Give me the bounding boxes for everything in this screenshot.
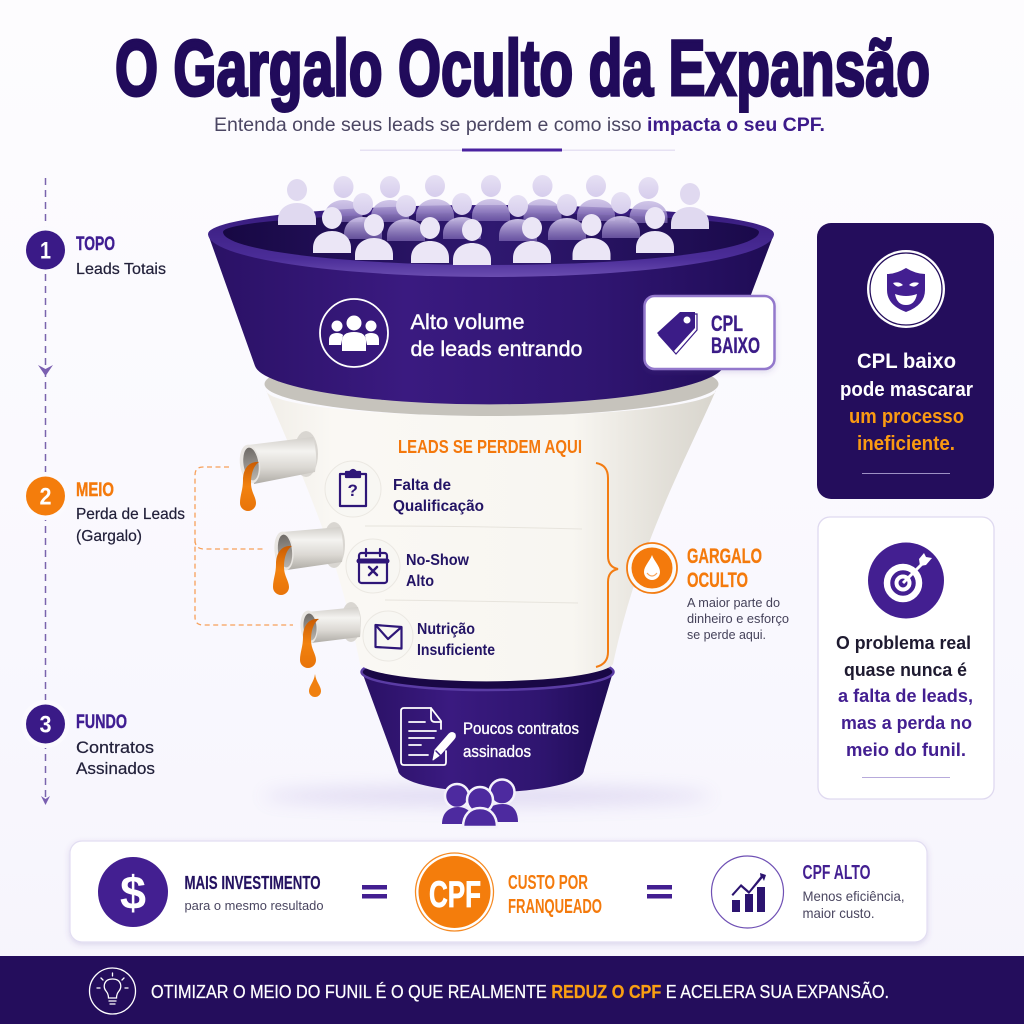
- row: falta de qualificação: Qualificação: [393, 498, 484, 515]
- stage 2: (Gargalo): [76, 528, 142, 545]
- callout: gargalo oculto: se perde aqui.: [687, 628, 766, 642]
- footer banner: [0, 956, 1024, 1024]
- panel: cpf equation: Menos eficiência,: [802, 888, 904, 904]
- icon: cpf badge: CPF: [429, 874, 481, 915]
- leak pipes: [237, 431, 361, 697]
- panel: cpf equation: FRANQUEADO: [508, 896, 602, 918]
- icon: leads group: [320, 299, 388, 367]
- row: falta de qualificação: [325, 461, 484, 517]
- funnel: top section: de leads entrando: [410, 338, 582, 361]
- row: falta de qualificação: ?: [348, 481, 358, 500]
- stage 2: 2: [40, 484, 52, 510]
- icon: light bulb: [90, 968, 136, 1014]
- stage timeline: [22, 178, 185, 805]
- funnel: bottom section: [362, 654, 614, 792]
- icon: contracts people: [442, 780, 518, 827]
- arrow: timeline end: [41, 796, 50, 805]
- bottom funnel text: Poucos contratos: [463, 720, 579, 738]
- panel: real problem: quase nunca é: [844, 659, 967, 680]
- icon: price tag: [657, 312, 697, 354]
- panel: cpf equation: para o mesmo resultado: [184, 898, 324, 913]
- panel: cpf equation: maior custo.: [802, 905, 874, 921]
- callout: gargalo oculto: [627, 543, 789, 642]
- icon: drop: [627, 543, 677, 593]
- funnel: middle section: [264, 352, 718, 681]
- middle row: [344, 192, 640, 241]
- icon: target: [868, 542, 944, 618]
- panel: cpl warning: pode mascarar: [840, 379, 973, 401]
- panel: cpf equation: CUSTO POR: [508, 872, 588, 894]
- heading: leads se perdem aqui: LEADS SE PERDEM AQUI: [398, 437, 582, 457]
- loose drop: [309, 674, 321, 697]
- stage 1: 1: [40, 238, 51, 264]
- panel: real problem: [818, 517, 994, 799]
- document icon: [401, 708, 455, 765]
- panel: cpl warning: CPL baixo: [857, 350, 956, 373]
- row: no-show alto: No-Show: [406, 552, 469, 569]
- timeline dashed line: [44, 178, 46, 800]
- stage 1: [22, 226, 166, 278]
- panel: cpl warning: [817, 223, 994, 499]
- front row: [313, 207, 674, 265]
- icon: rising chart: [712, 856, 784, 928]
- panel: real problem: meio do funil.: [846, 739, 966, 760]
- callout: gargalo oculto: OCULTO: [687, 569, 748, 592]
- pipe 3: [299, 602, 361, 668]
- panel: cpf equation: [70, 841, 927, 942]
- stage 2: MEIO: [76, 480, 114, 501]
- row: nutrição insuficiente: Nutrição: [417, 621, 475, 638]
- back row: [324, 175, 668, 223]
- stage 1: Leads Totais: [76, 261, 166, 278]
- funnel shadow: [262, 787, 712, 805]
- row: nutrição insuficiente: Insuficiente: [417, 642, 495, 659]
- stage 3: Contratos: [76, 738, 154, 757]
- panel: cpf equation: MAIS INVESTIMENTO: [184, 873, 320, 893]
- title divider: [360, 148, 675, 152]
- funnel: top section: [208, 175, 774, 404]
- stage 3: [22, 700, 155, 778]
- panel: real problem: O problema real: [836, 632, 971, 653]
- panel: real problem: mas a perda no: [841, 712, 972, 733]
- icon: dollar: $: [120, 866, 146, 919]
- callout: gargalo oculto: dinheiro e esforço: [687, 612, 789, 626]
- stage 1: TOPO: [76, 234, 115, 255]
- callout: gargalo oculto: GARGALO: [687, 545, 762, 568]
- footer message: OTIMIZAR O MEIO DO FUNIL É O QUE REALMENTE REDUZ O CPF E ACELERA SUA EXPANSÃO.: [151, 981, 889, 1002]
- panel: cpf equation: CPF ALTO: [802, 862, 870, 884]
- stage 3: Assinados: [76, 759, 155, 778]
- badge: cpl baixo: BAIXO: [711, 333, 760, 358]
- panel: real problem: a falta de leads,: [838, 685, 973, 706]
- bracket: [596, 463, 618, 667]
- icon: mask: [867, 250, 945, 328]
- crowd of leads: [278, 175, 709, 265]
- arrow: timeline mid: [38, 365, 53, 376]
- subtitle: Entenda onde seus leads se perdem e como isso impacta o seu CPF.: [214, 115, 825, 136]
- badge: cpl baixo: [644, 296, 774, 369]
- pipe 1: [237, 431, 318, 511]
- back row edge people: [278, 179, 709, 229]
- panel: cpl warning: um processo: [849, 406, 964, 428]
- panel: cpl warning: ineficiente.: [857, 433, 955, 455]
- stage 2: Perda de Leads: [76, 506, 185, 523]
- row: falta de qualificação: Falta de: [393, 477, 451, 494]
- row: no-show alto: [346, 539, 469, 593]
- row: nutrição insuficiente: [363, 611, 495, 661]
- top funnel text: Alto volume: [410, 311, 524, 334]
- pipe 2: [273, 522, 345, 595]
- stage 3: FUNDO: [76, 712, 127, 733]
- row: no-show alto: Alto: [406, 573, 434, 590]
- icon: cpf badge: [416, 853, 494, 931]
- middle funnel content: [325, 437, 618, 667]
- equals sign 2: [647, 885, 672, 898]
- badge: cpl baixo: CPL: [711, 311, 743, 336]
- dashed connector: pipes: [195, 467, 293, 625]
- icon: dollar: [98, 857, 168, 927]
- stage 2: [22, 472, 185, 545]
- equals sign 1: [362, 885, 387, 898]
- funnel: bottom section: assinados: [463, 743, 531, 761]
- callout: gargalo oculto: A maior parte do: [687, 596, 780, 610]
- stage 3: 3: [40, 712, 52, 738]
